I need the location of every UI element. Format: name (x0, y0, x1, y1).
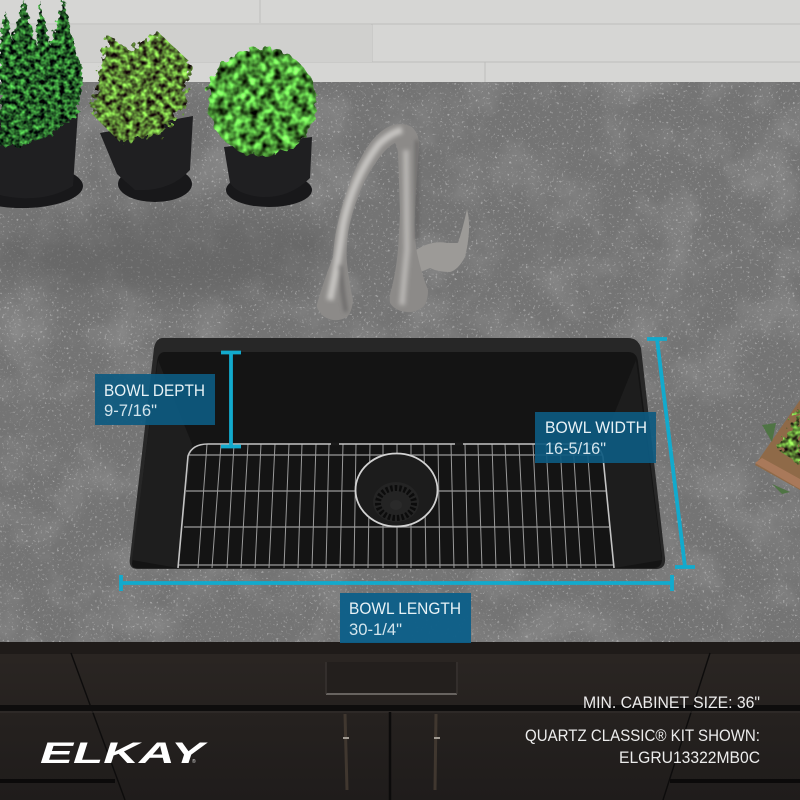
text: kit shown (525, 726, 760, 767)
potted plant: rosemary (0, 0, 84, 208)
floor planks (0, 0, 800, 83)
logo: Elkay: ELKAY (40, 737, 209, 770)
door handles (343, 714, 440, 790)
label: bowl length: BOWL LENGTH (349, 599, 461, 618)
drawer pull (326, 662, 457, 694)
drain strainer (356, 454, 438, 526)
text: kit shown: ELGRU13322MB0C (619, 748, 760, 767)
text: kit shown: QUARTZ CLASSIC® KIT SHOWN: (525, 726, 760, 745)
potted plant: ivy (208, 48, 316, 207)
dimension: bowl length (121, 575, 672, 643)
label: bowl depth: BOWL DEPTH (104, 381, 205, 400)
label: bowl length (340, 593, 471, 643)
countertop (0, 82, 800, 642)
label: bowl length: 30-1/4" (349, 620, 402, 639)
label: bowl depth: 9-7/16" (104, 401, 157, 420)
neck and base (317, 124, 428, 320)
sink basin (130, 338, 665, 569)
handle (416, 209, 469, 274)
label: bowl depth (95, 374, 215, 425)
logo: Elkay (40, 737, 209, 770)
dimension: bowl depth (95, 352, 241, 446)
logo: Elkay: ® (192, 758, 196, 765)
label: bowl width (535, 412, 656, 463)
dimension: bowl width (535, 339, 695, 567)
highlights (330, 130, 417, 312)
wire rack (178, 444, 614, 568)
label: bowl width: BOWL WIDTH (545, 418, 647, 437)
faucet (317, 124, 469, 320)
potted plant: herb (92, 32, 193, 202)
cabinet front (0, 642, 800, 800)
text: cabinet size: MIN. CABINET SIZE: 36" (583, 693, 760, 712)
label: bowl width: 16-5/16" (545, 439, 606, 458)
cutting board with herbs (755, 400, 800, 494)
